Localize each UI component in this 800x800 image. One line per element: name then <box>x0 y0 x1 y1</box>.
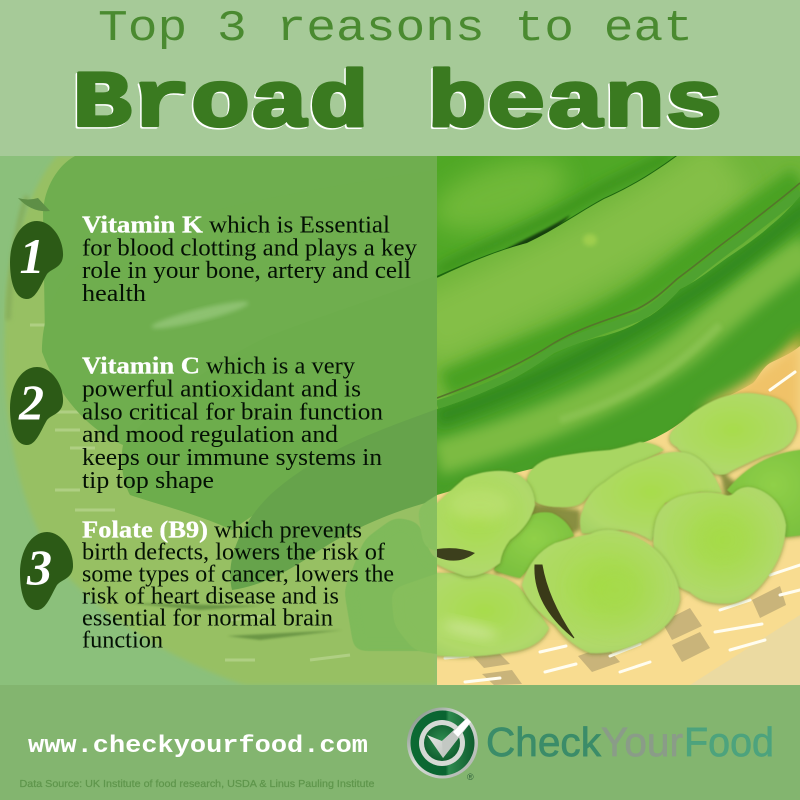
text: vitamin K <box>82 212 417 307</box>
badge: number 3 <box>20 532 73 610</box>
pod: third <box>122 275 437 530</box>
badge: number 1: 1 <box>20 228 44 284</box>
photo under the panel: muted pods and basket <box>0 156 450 685</box>
text: vitamin C <box>82 354 383 494</box>
text: vitamin C: Vitamin C <box>82 354 200 380</box>
bean: far right <box>727 450 800 537</box>
footer band <box>0 685 800 800</box>
bean: top left <box>420 471 535 576</box>
photo: broad bean pods and beans on a basket <box>420 145 800 685</box>
data source: Data Source: UK Institute of food research, USDA & Linus Pauling Institute <box>20 778 375 790</box>
reason 3 <box>20 518 394 654</box>
badge: number 1 <box>10 221 63 299</box>
logo wordmark: CheckYourFood <box>486 719 774 765</box>
text: vitamin C: powerful antioxidant and is <box>82 376 361 402</box>
beans behind panel <box>345 518 445 650</box>
text: folate: risk of heart disease and is <box>82 584 339 610</box>
text: vitamin K: which is Essential <box>209 212 390 238</box>
reason 2 <box>10 354 383 494</box>
text: vitamin C: tip top shape <box>82 468 214 494</box>
logo wordmark: CheckYourFood: Food <box>684 719 774 765</box>
text: vitamin K: role in your bone, artery and cell <box>82 258 411 284</box>
text: folate: which prevents <box>214 518 362 544</box>
text: folate: birth defects, lowers the risk of <box>82 540 385 566</box>
text: vitamin C: also critical for brain function <box>82 400 383 426</box>
title: Top 3 reasons to eat: Top 3 reasons to eat <box>98 4 693 54</box>
pod: second <box>42 310 342 445</box>
logo wordmark: CheckYourFood: Your <box>601 719 683 765</box>
pod: fourth <box>230 409 437 590</box>
logo icon: check mark badge: ® <box>467 772 474 782</box>
bean: middle <box>580 452 722 541</box>
badge: number 2: 2 <box>18 374 44 430</box>
header band <box>0 0 800 156</box>
text: vitamin C: and mood regulation and <box>82 422 338 448</box>
basket weave <box>437 340 800 685</box>
title: Broad beans: Broad beans <box>72 60 724 150</box>
bean: front heart <box>522 530 680 653</box>
text: vitamin K: Vitamin K <box>82 212 203 238</box>
text: folate <box>82 518 394 654</box>
text: folate: Folate (B9) <box>82 518 208 544</box>
pod: top <box>43 156 437 340</box>
leaf near rim <box>18 198 50 211</box>
bean: large heart right <box>653 487 786 604</box>
bean: top right <box>670 393 797 475</box>
text: vitamin C: which is a very <box>206 354 355 380</box>
bean: behind left <box>494 512 574 578</box>
text: folate: some types of cancer, lowers the <box>82 562 394 588</box>
title: Broad beans: Broad beans <box>71 61 722 152</box>
pod: lower <box>437 196 800 495</box>
text: vitamin K: health <box>82 281 146 307</box>
pod: upper <box>437 156 677 278</box>
text: vitamin C: keeps our immune systems in <box>82 445 382 471</box>
logo wordmark: CheckYourFood: Check <box>486 719 601 765</box>
text: vitamin K: for blood clotting and plays a key <box>82 236 417 262</box>
badge: number 2 <box>10 367 63 445</box>
shadows between beans <box>495 470 745 575</box>
logo icon: check mark badge <box>407 708 478 782</box>
reason 1 <box>10 212 417 307</box>
bean: bottom left <box>420 573 549 657</box>
website url: www.checkyourfood.com <box>28 733 368 760</box>
badge: number 3: 3 <box>26 539 52 595</box>
bean: long flat <box>526 442 664 507</box>
shadows under pods <box>127 603 343 640</box>
pod: middle <box>420 156 800 416</box>
text: folate: function <box>82 628 163 654</box>
text: folate: essential for normal brain <box>82 606 333 632</box>
